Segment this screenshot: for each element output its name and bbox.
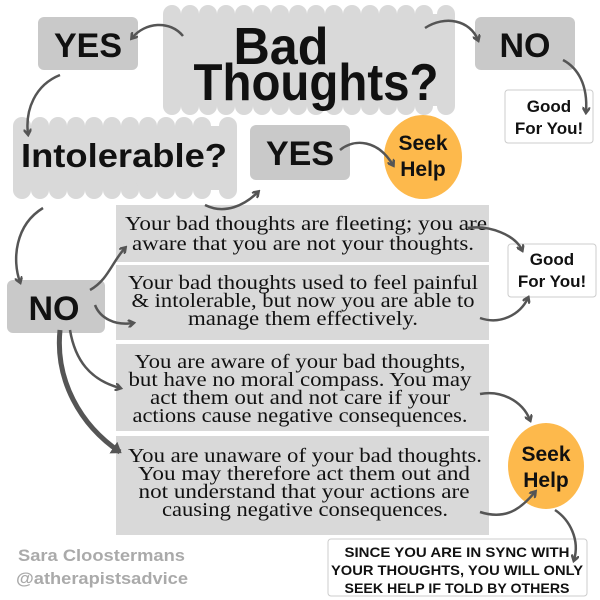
text box 4 bbox=[116, 436, 489, 535]
Seek Help circle 1 bbox=[384, 115, 462, 199]
Good For You 1: Good bbox=[527, 97, 571, 116]
text box 4: You may therefore act them out and bbox=[138, 463, 470, 485]
text box 2: manage them effectively. bbox=[188, 308, 418, 330]
text box 3: but have no moral compass. You may bbox=[128, 369, 472, 391]
Seek Help circle 2 bbox=[508, 423, 584, 509]
Good For You 1 bbox=[505, 90, 593, 143]
text box 1: aware that you are not your thoughts. bbox=[132, 233, 474, 255]
NO box top: NO bbox=[500, 27, 550, 65]
Seek Help circle 2: Help bbox=[523, 469, 569, 492]
text box 2: & intolerable, but now you are able to bbox=[132, 290, 474, 312]
NO box top bbox=[475, 17, 575, 70]
text box 3: act them out and not care if your bbox=[150, 387, 450, 409]
bottom callout bbox=[328, 539, 587, 596]
text box 3 bbox=[116, 344, 489, 431]
NO box lower bbox=[7, 280, 105, 333]
signature: Sara Cloostermans bbox=[18, 546, 185, 565]
text box 2 bbox=[116, 265, 489, 340]
YES box 2 bbox=[250, 125, 350, 180]
text box 3: actions cause negative consequences. bbox=[132, 405, 468, 427]
title box: Thoughts? bbox=[194, 54, 438, 112]
signature: @atherapistsadvice bbox=[16, 569, 188, 588]
Good For You 2: For You! bbox=[518, 272, 586, 291]
bottom callout: SINCE YOU ARE IN SYNC WITH bbox=[344, 544, 570, 560]
Seek Help circle 2: Seek bbox=[521, 443, 571, 466]
YES box 2: YES bbox=[266, 135, 334, 173]
YES box top bbox=[38, 17, 138, 70]
Seek Help circle 1: Help bbox=[400, 158, 446, 181]
text box 3: You are aware of your bad thoughts, bbox=[134, 351, 466, 373]
title box bbox=[163, 5, 455, 115]
Good For You 2 bbox=[508, 244, 596, 297]
title box: Bad bbox=[234, 18, 328, 76]
Intolerable box: Intolerable? bbox=[21, 137, 227, 174]
Intolerable box bbox=[13, 117, 237, 199]
YES box top: YES bbox=[54, 27, 122, 65]
text box 4: not understand that your actions are bbox=[138, 481, 470, 503]
signature bbox=[16, 546, 188, 588]
bottom callout: YOUR THOUGHTS, YOU WILL ONLY bbox=[331, 562, 584, 578]
NO box lower: NO bbox=[28, 290, 80, 328]
Good For You 1: For You! bbox=[515, 119, 583, 138]
bottom callout: SEEK HELP IF TOLD BY OTHERS bbox=[344, 580, 570, 596]
text box 4: You are unaware of your bad thoughts. bbox=[128, 445, 482, 467]
text box 2: Your bad thoughts used to feel painful bbox=[128, 272, 479, 294]
Good For You 2: Good bbox=[530, 250, 574, 269]
text box 1 bbox=[116, 205, 489, 262]
Seek Help circle 1: Seek bbox=[398, 132, 448, 155]
text box 1: Your bad thoughts are fleeting; you are bbox=[125, 213, 487, 235]
text box 4: causing negative consequences. bbox=[162, 499, 448, 521]
